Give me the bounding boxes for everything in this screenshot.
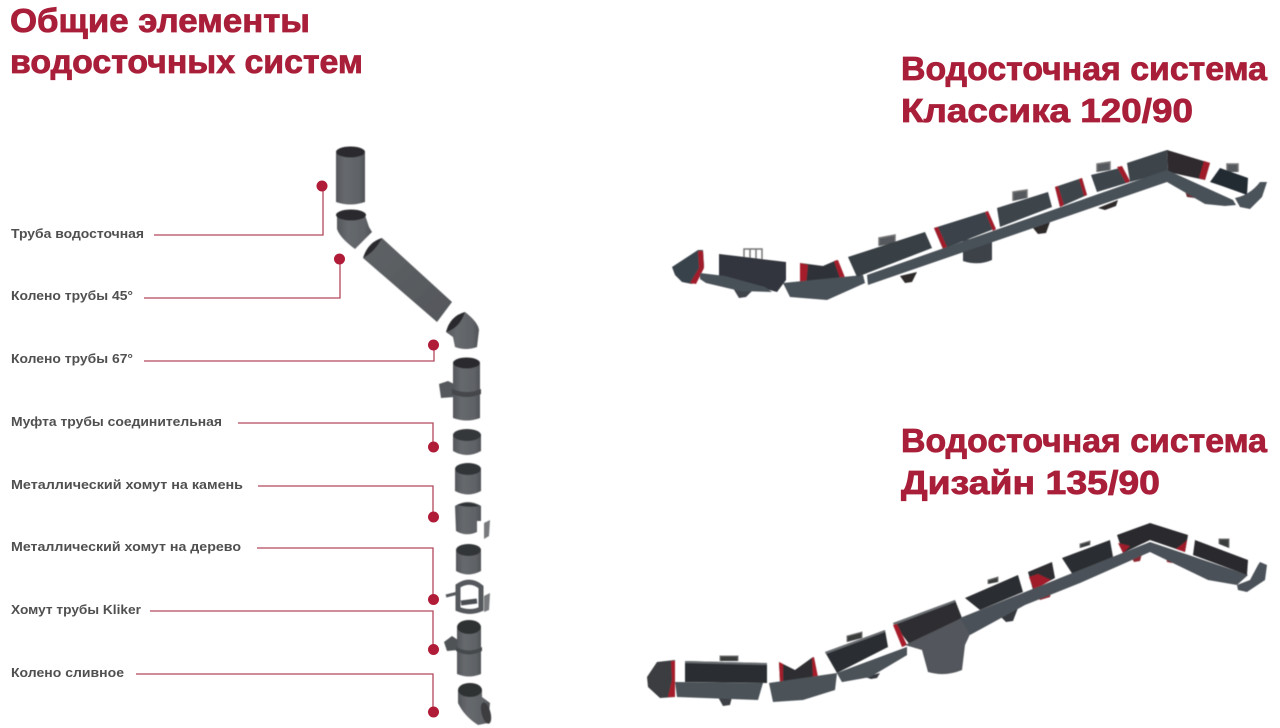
gutter section with hook [1091, 162, 1130, 192]
title: Design system: Водосточная система [901, 422, 1268, 459]
title: Design system [901, 422, 1268, 501]
part: elbow 67 [446, 312, 479, 349]
part: short pipe [455, 463, 481, 494]
gutter end cap [647, 660, 675, 698]
title: common elements: Общие элементы [10, 2, 310, 39]
gutter elbow [769, 657, 837, 702]
gutter section with hook [675, 656, 767, 706]
gutter corner back [1127, 150, 1210, 182]
label: pipe coupling: Муфта трубы соединительная [11, 414, 222, 429]
gutter end cap [672, 250, 704, 284]
gutter section with hook [825, 630, 907, 682]
gutter section [848, 232, 932, 277]
part: top pipe [336, 146, 365, 204]
part: metal clamp for stone [455, 502, 490, 539]
label: pipe elbow 45: Колено трубы 45° [11, 288, 133, 303]
gutter section with hook [700, 249, 786, 298]
part: coupling [453, 429, 481, 455]
gutter joint [1028, 562, 1055, 590]
title: Classic system: Классика 120/90 [901, 92, 1193, 129]
gutter section right [1210, 164, 1248, 195]
part: outlet socket pipe [444, 620, 482, 676]
gutter system: Design 135/90 [647, 523, 1267, 706]
label: downpipe: Труба водосточная [11, 226, 144, 241]
gutter corner [1117, 523, 1188, 553]
part: socket pipe with bracket [439, 358, 481, 420]
label: pipe elbow 67 [11, 340, 439, 366]
label: drain elbow [11, 665, 439, 718]
gutter section with outlet [934, 211, 996, 263]
part: diagonal pipe [363, 238, 452, 322]
gutter section with hook [1062, 540, 1113, 575]
label: metal clamp for wood: Металлический хомут на дерево [11, 539, 241, 554]
label: metal clamp for wood [11, 539, 439, 605]
gutter front band 2 [837, 647, 907, 682]
gutter elbow [783, 260, 865, 300]
gutter system: Classic 120/90 [672, 150, 1267, 300]
part: short pipe [456, 544, 481, 574]
label: pipe coupling [11, 414, 439, 452]
title: Design system: Дизайн 135/90 [901, 464, 1160, 501]
gutter drops [900, 185, 1199, 283]
gutter section with hook [997, 190, 1052, 227]
part: Kliker clamp [446, 582, 490, 612]
gutter front band [960, 542, 1248, 635]
gutter section with hook [965, 575, 1023, 610]
label list with leader lines [11, 180, 439, 718]
part: elbow 45 [336, 210, 372, 249]
gutter section right [1193, 539, 1248, 575]
downpipe exploded assembly [336, 146, 493, 725]
label: metal clamp for stone: Металлический хомут на камень [11, 477, 243, 492]
gutter end cap right [1237, 562, 1267, 592]
title: common elements: водосточных систем [10, 43, 363, 80]
label: Kliker pipe clamp: Хомут трубы Kliker [11, 602, 141, 617]
title: Classic system: Водосточная система [901, 50, 1268, 87]
gutter section with funnel outlet [893, 600, 972, 674]
title: common elements [10, 2, 363, 80]
gutter front band [867, 170, 1236, 285]
label: downpipe [11, 180, 328, 241]
label: metal clamp for stone [11, 477, 439, 522]
label: pipe elbow 67: Колено трубы 67° [11, 351, 133, 366]
gutter end cap right [1235, 182, 1267, 209]
gutter section [1055, 178, 1087, 207]
label: Kliker pipe clamp [11, 602, 439, 655]
title: Classic system [901, 50, 1268, 129]
part: drain elbow [458, 683, 493, 725]
label: drain elbow: Колено сливное [11, 665, 124, 680]
label: pipe elbow 45 [11, 254, 345, 303]
gutter drops [1000, 550, 1177, 622]
